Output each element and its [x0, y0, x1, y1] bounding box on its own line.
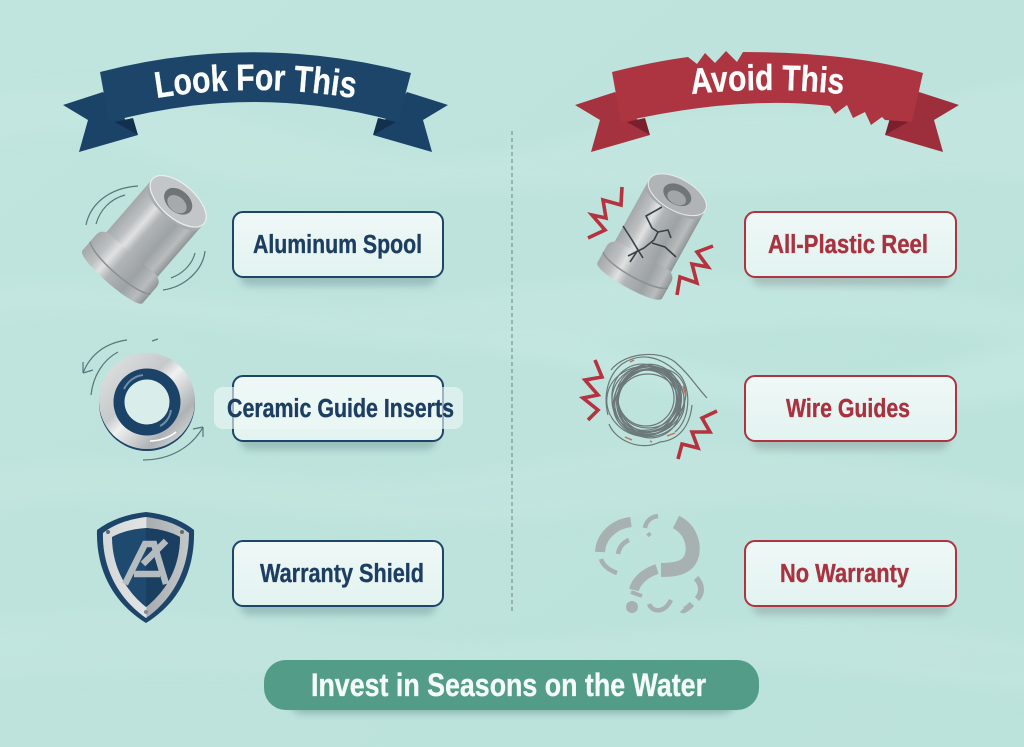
- icon: aluminum spool: [77, 162, 220, 309]
- label: No Warranty: No Warranty: [780, 560, 910, 588]
- label: Warranty Shield: [233, 541, 443, 615]
- label: All-Plastic Reel: [745, 212, 956, 286]
- icon: broken question mark: [600, 516, 701, 613]
- icon: ceramic guide ring: [83, 339, 203, 460]
- label: Ceramic Guide Inserts: Ceramic Guide Inserts: [227, 395, 454, 423]
- banner: Look For This: [63, 52, 448, 152]
- label: Warranty Shield: Warranty Shield: [260, 560, 424, 588]
- label: Aluminum Spool: Aluminum Spool: [253, 231, 422, 259]
- divider line: [511, 131, 513, 612]
- label: Ceramic Guide Inserts: [214, 376, 463, 450]
- label: Aluminum Spool: [233, 212, 443, 286]
- label: Wire Guides: [745, 376, 956, 450]
- footer pill: Invest in Seasons on the Water: [264, 660, 759, 714]
- banner: Avoid This: [575, 51, 959, 190]
- label: All-Plastic Reel: All-Plastic Reel: [768, 231, 928, 259]
- icon: warranty shield: [97, 512, 194, 623]
- banner: Avoid This: Avoid This: [692, 64, 844, 94]
- footer pill: Invest in Seasons on the Water: Invest in Seasons on the Water: [311, 667, 706, 703]
- banner: Look For This: Look For This: [154, 64, 356, 98]
- icon: tangled wire guides: [583, 352, 717, 459]
- label: Wire Guides: Wire Guides: [786, 395, 910, 423]
- label: No Warranty: [745, 541, 956, 615]
- icon: cracked spool: [588, 163, 717, 305]
